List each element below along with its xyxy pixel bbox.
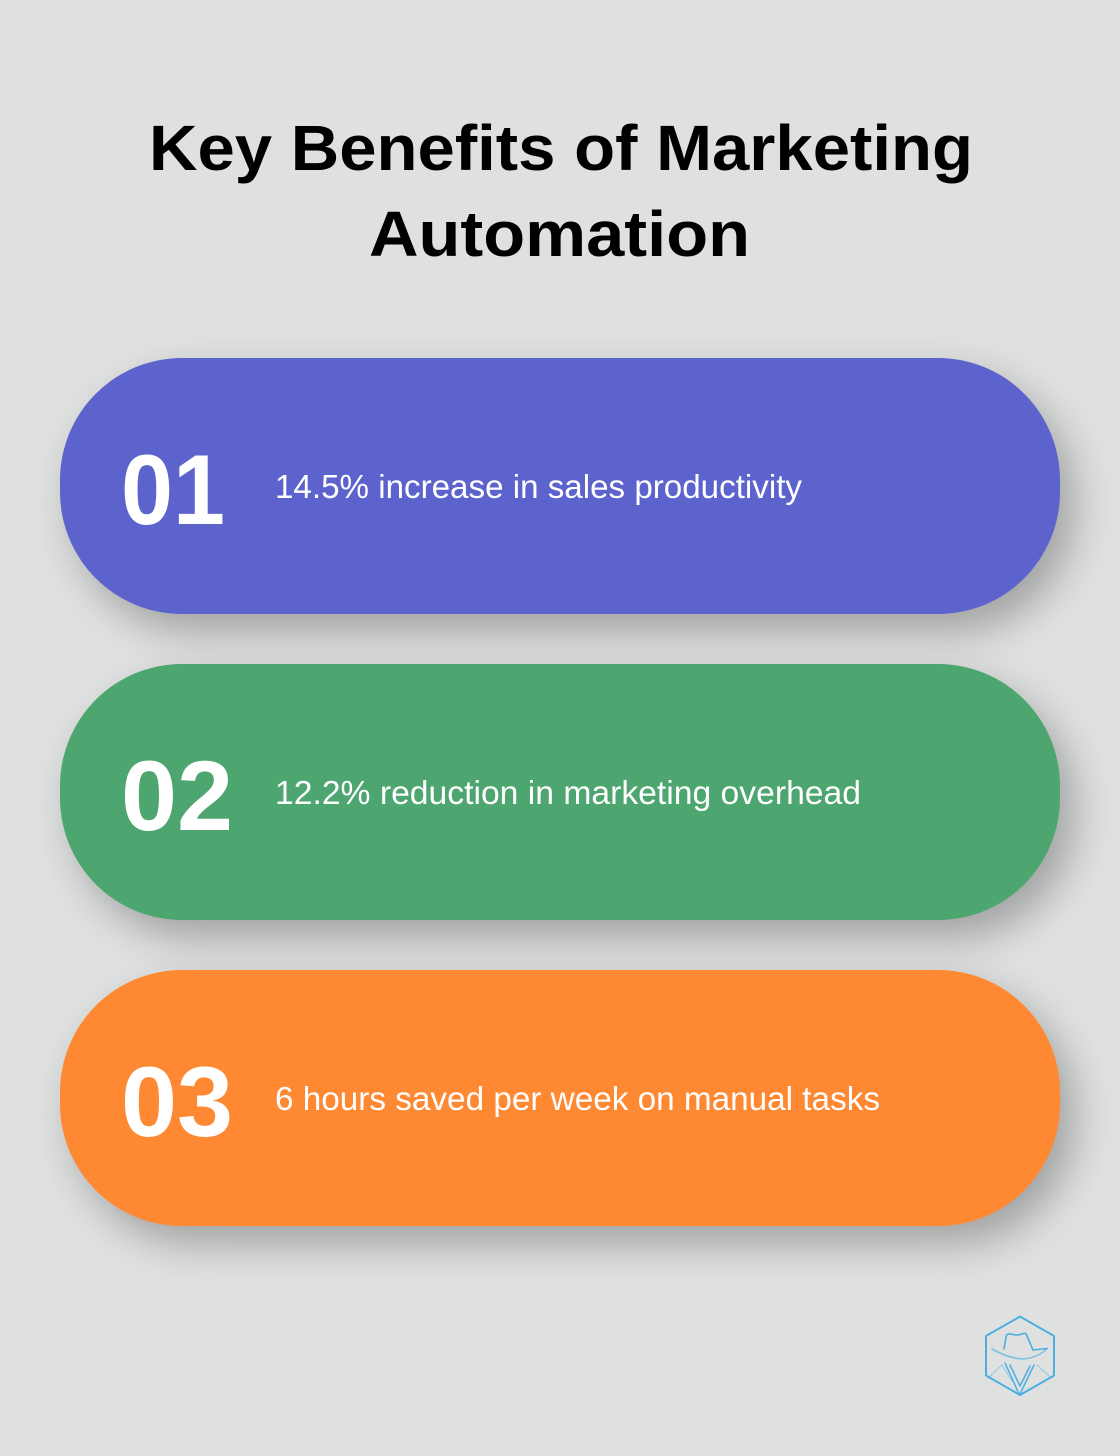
panel: benefit 1 background [60,358,1060,614]
benefit 1 text: 01 [121,434,225,545]
benefit 3 text: 03 [121,1046,233,1157]
benefit 3 text: 6 hours saved per week on manual tasks [275,1080,880,1117]
panel: benefit 3 background [60,970,1060,1226]
title [149,112,973,270]
title: Automation [369,198,750,270]
icon: logo spy in hexagon [986,1316,1054,1395]
title: Key Benefits of Marketing [149,112,973,184]
benefit 3 text [121,1046,880,1157]
benefit 1 text [121,434,802,545]
benefit 1 text: 14.5% increase in sales productivity [275,468,802,505]
benefit 2 text [121,740,861,851]
panel: benefit 2 background [60,664,1060,920]
benefit 2 text: 12.2% reduction in marketing overhead [275,774,861,811]
benefit 2 text: 02 [121,740,233,851]
